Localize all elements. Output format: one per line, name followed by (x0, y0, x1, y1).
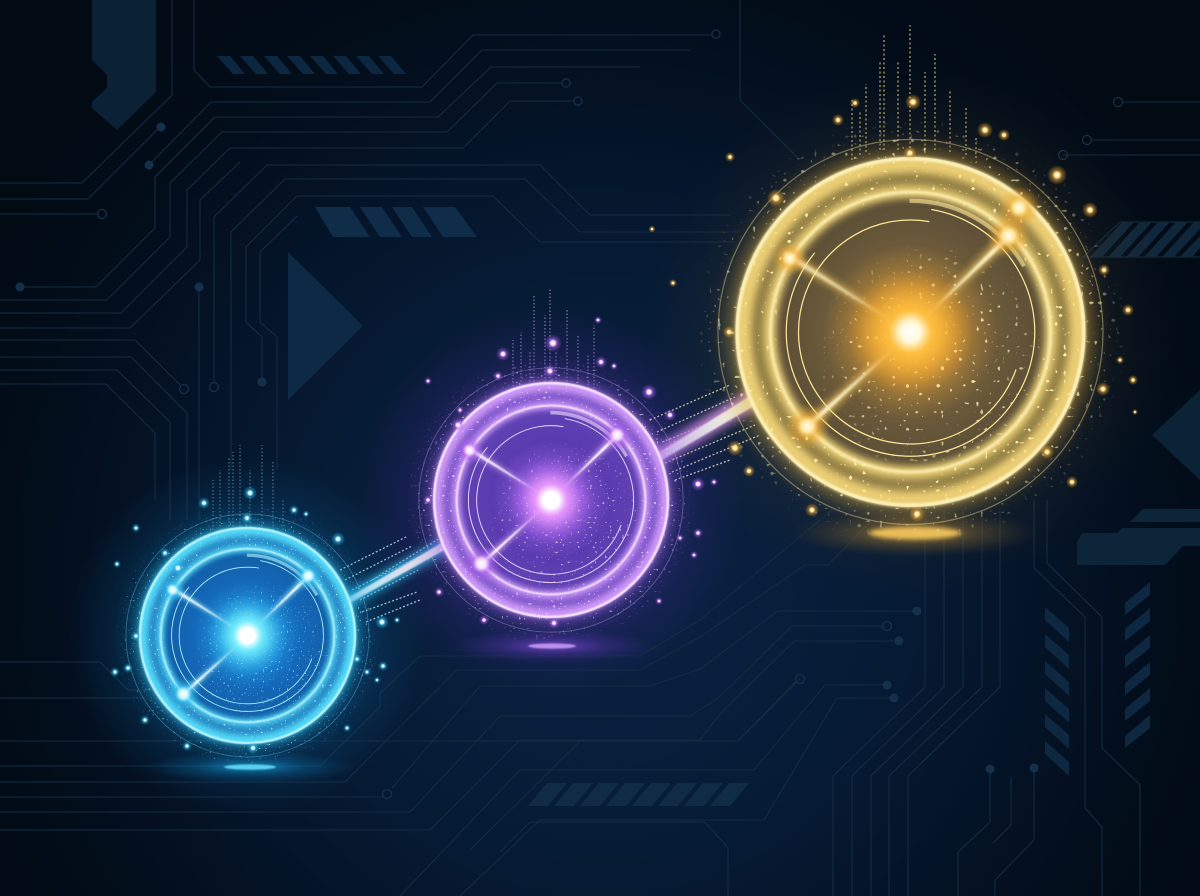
sphere body (433, 382, 669, 618)
inner ring glow (770, 192, 1050, 472)
outer thin ring (419, 368, 683, 632)
rim glow (438, 387, 664, 613)
light rays (168, 572, 312, 698)
inner ring (457, 406, 645, 594)
core (506, 455, 596, 545)
orb: blue (84, 473, 408, 798)
data streams: purple (513, 288, 594, 392)
triangle arrow (288, 252, 363, 400)
sparks: gold (648, 94, 1138, 522)
orb: purple (376, 325, 728, 672)
floor glow: blue (145, 751, 355, 783)
floor glow: purple (447, 629, 657, 663)
orb: gold (690, 111, 1126, 544)
chevron strip: top (217, 56, 406, 74)
hatch strip: top right (1090, 222, 1200, 257)
light rays (464, 431, 621, 568)
connector beam: purple to gold (650, 385, 762, 480)
connector beam: blue to purple (340, 536, 450, 622)
thin arcs (160, 548, 335, 723)
sphere body (736, 157, 1086, 507)
halo (356, 305, 746, 695)
inner ring glow (457, 406, 645, 594)
light rays (782, 230, 1015, 433)
tech shape: right triangle (1152, 390, 1200, 480)
rim glow (744, 166, 1077, 498)
chevron strip: bottom (528, 783, 749, 806)
lens flares (160, 561, 323, 711)
inner ring (770, 192, 1050, 472)
rim outer glow (139, 527, 356, 744)
rim glow (143, 531, 352, 740)
rim (140, 528, 355, 743)
chevron column: left (1045, 607, 1069, 776)
speckles (116, 504, 380, 765)
inner ring glow (161, 549, 334, 722)
sparks: blue (110, 486, 400, 754)
rim outer glow (433, 382, 669, 618)
halo (68, 456, 427, 815)
rim (434, 383, 668, 617)
tech shape: right bars (1077, 509, 1200, 565)
rim (737, 159, 1084, 505)
chevron column: right (1125, 582, 1150, 748)
chevron strip: middle (315, 207, 477, 237)
speckles (408, 357, 694, 641)
data streams: gold (852, 25, 976, 160)
outer thin ring (126, 514, 369, 757)
outer thin ring (718, 140, 1103, 524)
core (206, 594, 289, 677)
rim outer glow (736, 157, 1086, 507)
inner ring (161, 549, 334, 722)
thin arcs (455, 404, 647, 596)
speckles (700, 118, 1122, 542)
data streams: blue (213, 445, 283, 530)
sphere body (139, 527, 356, 744)
tech shape: top-left notched bar (92, 0, 156, 130)
lens flares (455, 419, 634, 583)
thin arcs (767, 188, 1054, 476)
core (848, 269, 974, 395)
sparks: purple (423, 316, 718, 629)
floor glow: gold (790, 509, 1040, 557)
halo (648, 70, 1173, 594)
lens flares (772, 187, 1040, 449)
